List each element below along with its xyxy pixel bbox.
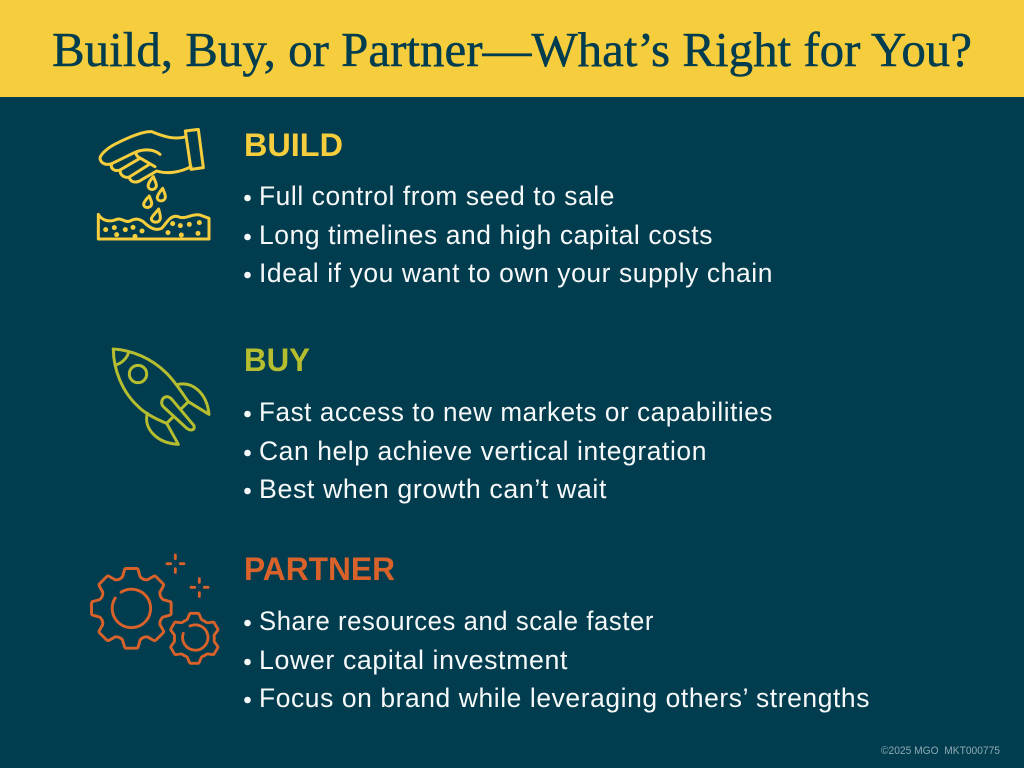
list: buy points: Can help achieve vertical integration xyxy=(259,436,707,466)
list: partner points: Lower capital investment xyxy=(259,645,568,675)
list: build points xyxy=(244,181,773,288)
title: Build, Buy, or Partner—What’s Right for You? xyxy=(52,22,972,77)
list: build points: Ideal if you want to own your supply chain xyxy=(259,258,773,288)
heading: partner: PARTNER xyxy=(244,551,395,587)
list: partner points: Focus on brand while leveraging others’ strengths xyxy=(259,683,870,713)
list: buy points: Best when growth can’t wait xyxy=(259,474,607,504)
icon: rocket xyxy=(113,349,209,444)
header banner xyxy=(0,0,1024,97)
panel: buy xyxy=(113,342,773,504)
list: buy points: Fast access to new markets or capabilities xyxy=(259,397,773,427)
icon: hand sowing seeds xyxy=(98,129,209,239)
panel: build xyxy=(98,127,773,288)
list: partner points: Share resources and scale faster xyxy=(259,606,654,636)
heading: build: BUILD xyxy=(244,127,343,163)
heading: buy: BUY xyxy=(244,342,310,378)
footer copyright: ©2025 MGO MKT000775 xyxy=(881,745,1000,757)
panel: partner xyxy=(92,551,870,713)
list: partner points xyxy=(244,606,870,713)
icon: gears xyxy=(92,555,221,663)
list: build points: Full control from seed to sale xyxy=(259,181,615,211)
list: buy points xyxy=(244,397,773,504)
list: build points: Long timelines and high capital costs xyxy=(259,220,713,250)
